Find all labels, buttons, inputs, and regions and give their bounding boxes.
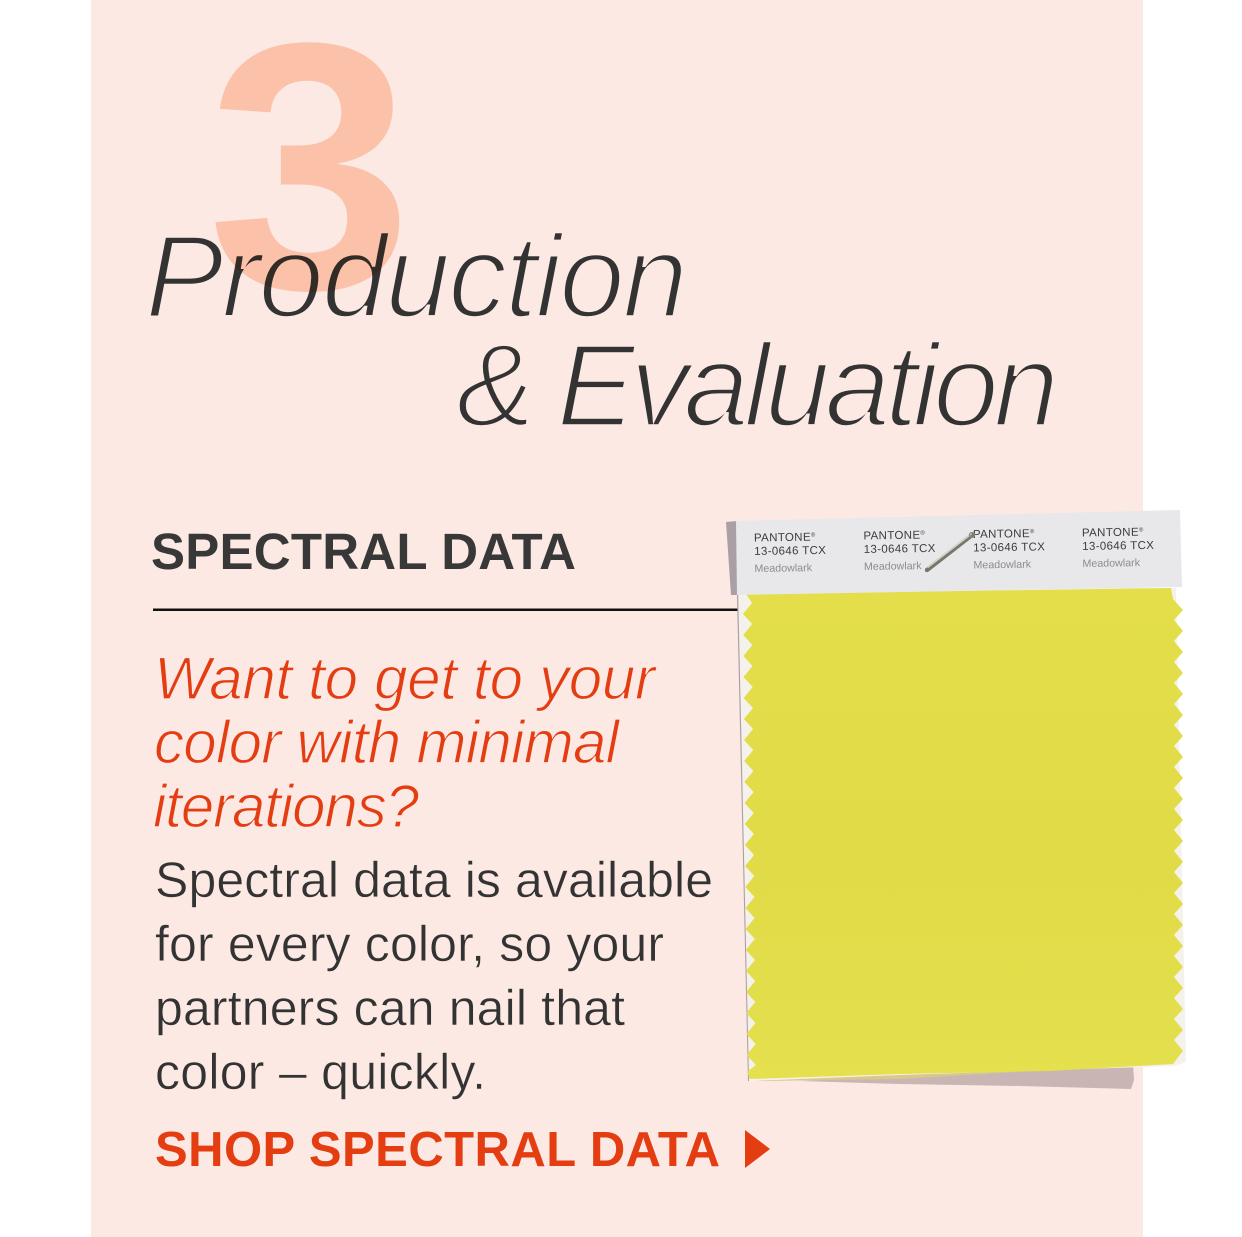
title: Production: Production	[145, 211, 688, 343]
label column 2: Meadowlark	[864, 560, 922, 573]
icon: safety pin	[927, 532, 974, 570]
body text: color – quickly.	[155, 1044, 486, 1100]
orange question: color with minimal	[154, 709, 621, 776]
label column 3: ®	[1030, 528, 1035, 535]
label column 3: Meadowlark	[973, 559, 1032, 571]
section heading: SPECTRAL DATA	[151, 523, 576, 580]
body text: for every color, so your	[155, 916, 664, 972]
label column 4: Meadowlark	[1082, 557, 1141, 570]
orange question	[153, 645, 657, 840]
orange question: Want to get to your	[154, 645, 657, 712]
label column 3	[973, 528, 1046, 571]
swatch fold underside	[750, 1070, 1050, 1081]
label column 1: Meadowlark	[754, 562, 813, 575]
label column 3: PANTONE	[973, 528, 1030, 541]
body text	[155, 852, 713, 1100]
label column 1: 13-0646 TCX	[754, 545, 826, 558]
label column 4: 13-0646 TCX	[1082, 540, 1154, 553]
label column 2: PANTONE	[863, 530, 921, 542]
swatch left paper edge	[726, 521, 737, 595]
label column 1: PANTONE	[754, 532, 811, 544]
title: and Evaluation: & Evaluation	[456, 320, 1059, 452]
swatch header label	[736, 510, 1182, 595]
body text: partners can nail that	[155, 980, 625, 1036]
label column 4	[1082, 526, 1155, 570]
call to action link: SHOP SPECTRAL DATA	[155, 1123, 720, 1177]
label column 4: PANTONE	[1082, 527, 1139, 539]
swatch yellow fabric	[743, 588, 1183, 1079]
label column 4: ®	[1139, 527, 1144, 534]
swatch left thin edge	[737, 595, 749, 1081]
body text: Spectral data is available	[155, 852, 713, 908]
label column 2: ®	[920, 530, 925, 537]
swatch shadow	[800, 1064, 1134, 1089]
icon: arrow	[745, 1130, 770, 1168]
label column 2: 13-0646 TCX	[864, 543, 936, 556]
divider line	[153, 608, 739, 611]
pantone swatch	[726, 510, 1186, 1089]
label column 3: 13-0646 TCX	[973, 541, 1045, 554]
orange question: iterations?	[153, 773, 420, 840]
label column 1	[754, 531, 827, 575]
swatch backing paper	[738, 588, 1186, 1081]
label column 1: ®	[811, 532, 816, 539]
label column 2	[863, 529, 936, 573]
title heading	[145, 0, 1059, 452]
